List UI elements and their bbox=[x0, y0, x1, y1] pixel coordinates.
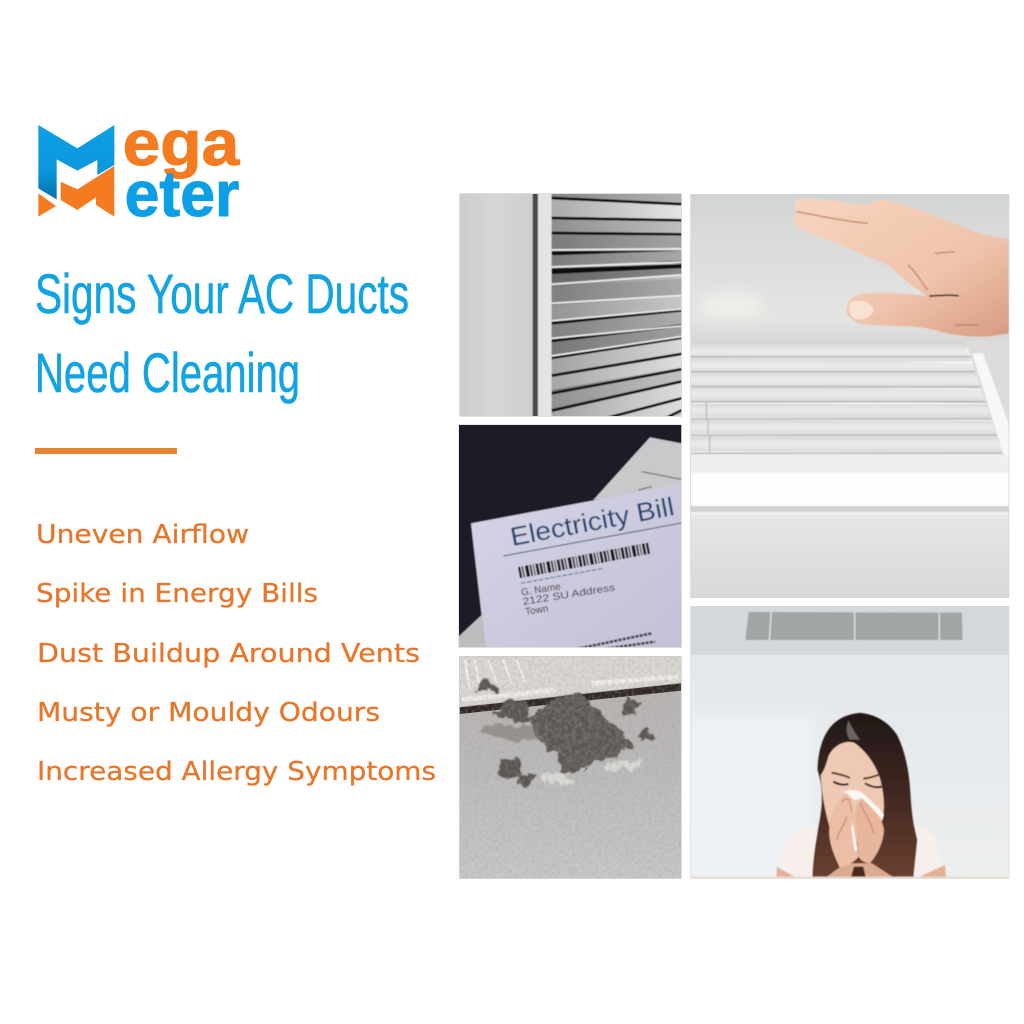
hands bbox=[829, 792, 859, 867]
right vent edge bbox=[967, 345, 1008, 436]
panel: woman sneezing photo bbox=[688, 600, 1015, 883]
logo word: eter: eter bbox=[125, 158, 239, 230]
panel: louvered vent photo bbox=[455, 190, 685, 420]
barcode bbox=[519, 548, 650, 573]
list of signs: Dust Buildup Around Vents bbox=[37, 639, 420, 669]
logo mark: orange arrow bbox=[38, 193, 56, 217]
title: Signs Your AC Ducts bbox=[35, 262, 409, 325]
tissue bbox=[843, 790, 884, 819]
white frame bbox=[688, 473, 1015, 506]
logo mark: orange M bbox=[61, 166, 114, 217]
panel: dust buildup photo bbox=[459, 656, 681, 879]
woman bbox=[777, 713, 947, 882]
bill address: 2122 SU Address bbox=[522, 582, 616, 608]
infographic canvas bbox=[35, 125, 1010, 879]
dust clumps bbox=[475, 678, 655, 787]
list of signs: Uneven Airflow bbox=[36, 520, 249, 550]
face bbox=[821, 742, 884, 843]
list of signs: Increased Allergy Symptoms bbox=[37, 757, 436, 787]
panel: electricity bill photo bbox=[455, 420, 685, 650]
bill heading: Electricity Bill bbox=[508, 491, 676, 552]
shirt bbox=[780, 825, 942, 878]
hair bbox=[812, 713, 917, 878]
list of signs: Musty or Mouldy Odours bbox=[37, 698, 380, 728]
bill address: Town bbox=[524, 603, 549, 618]
vent edge bbox=[460, 657, 681, 707]
panel: hand over ceiling vent photo bbox=[688, 190, 1015, 601]
paper behind bill bbox=[593, 437, 685, 500]
title bbox=[35, 262, 409, 404]
logo: Mega Meter bbox=[38, 107, 240, 230]
arms bbox=[776, 864, 946, 878]
hand bbox=[793, 198, 1013, 337]
bill address bbox=[521, 584, 616, 615]
vent slats bbox=[688, 344, 971, 362]
list of signs bbox=[36, 520, 436, 787]
neck bbox=[825, 863, 895, 878]
ceiling vent bbox=[745, 612, 963, 640]
bill sheet bbox=[471, 483, 685, 650]
list of signs: Spike in Energy Bills bbox=[36, 579, 318, 609]
logo word: ega: ega bbox=[123, 107, 240, 179]
bill address: G. Name bbox=[520, 581, 562, 599]
title: Need Cleaning bbox=[35, 341, 300, 404]
logo mark: blue M bbox=[38, 125, 114, 199]
orange divider bbox=[35, 448, 177, 454]
ceiling strip bbox=[691, 607, 1008, 655]
